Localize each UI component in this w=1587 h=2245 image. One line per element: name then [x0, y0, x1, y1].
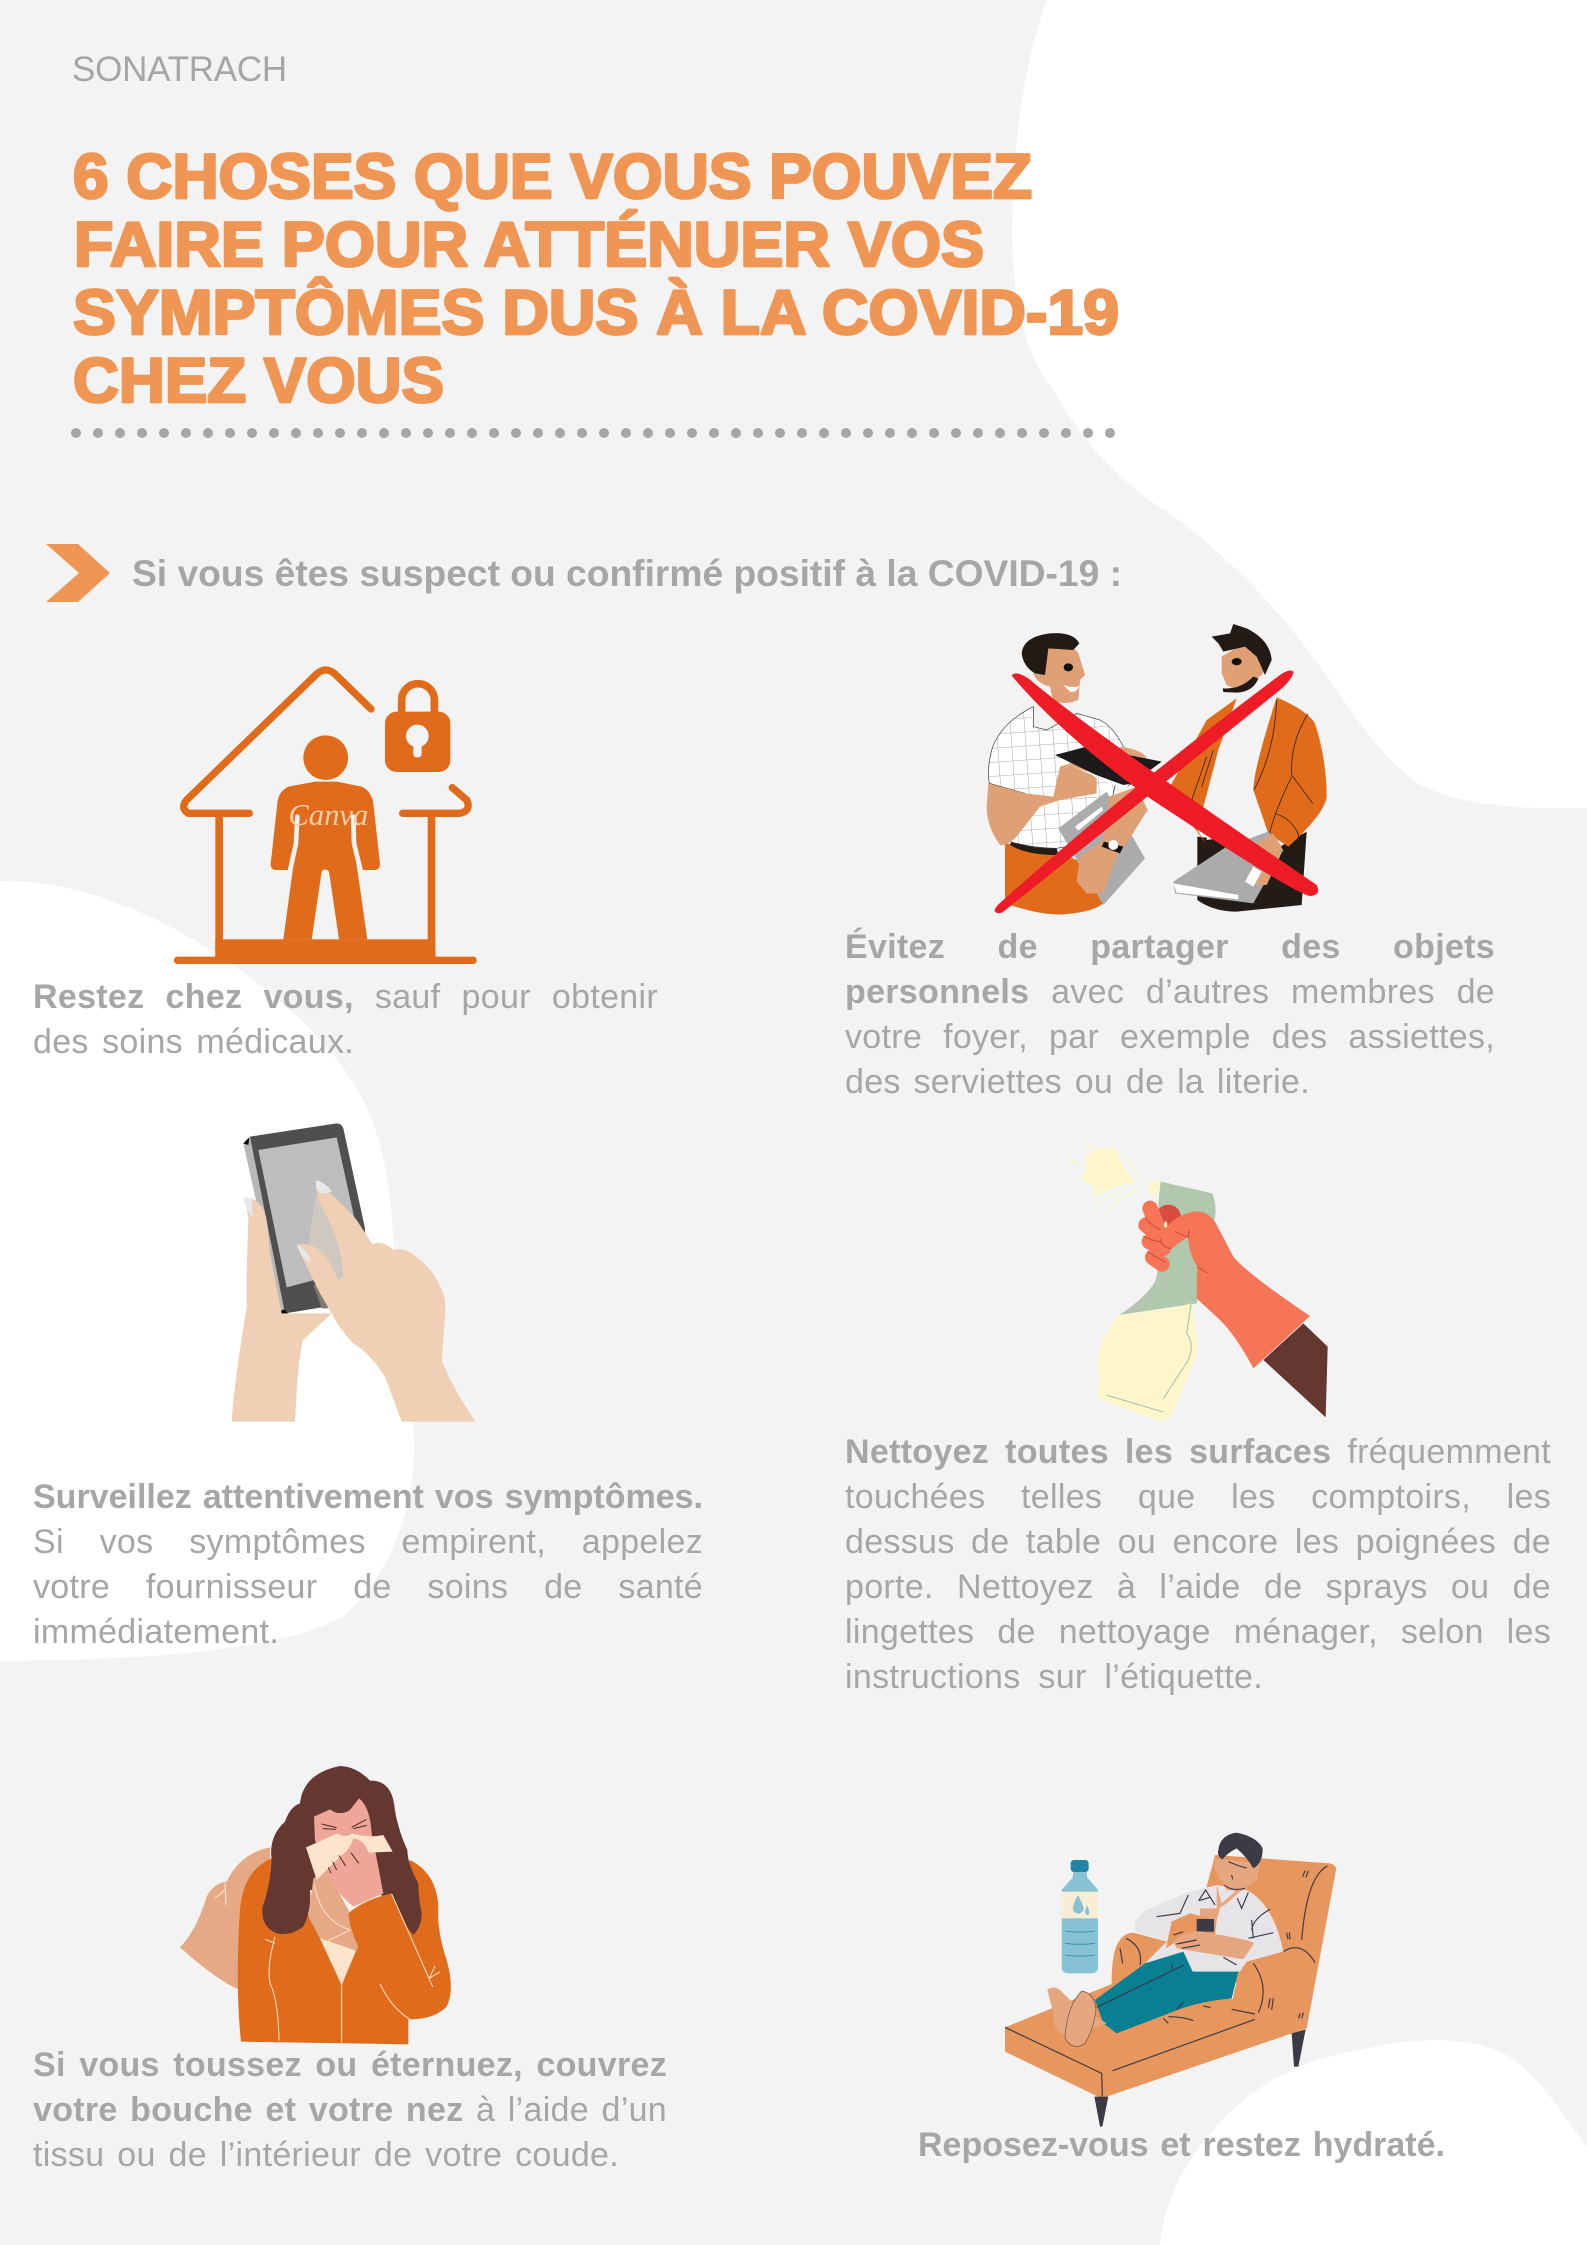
text: clean surfaces: touchées telles que les comptoirs, les: [845, 1478, 1551, 1516]
text: do not share items: personnels avec d’autres membres de: [845, 972, 1495, 1010]
illustration: gloved hand with spray bottle: [1069, 1143, 1328, 1421]
text: do not share items: Évitez de partager des objets: [845, 928, 1495, 966]
text: monitor symptoms: immédiatement.: [33, 1613, 279, 1651]
title: FAIRE POUR ATTÉNUER VOS: [74, 210, 984, 280]
dotted divider: [71, 428, 1115, 438]
illustration: man resting on chaise with water bottle: [1005, 1832, 1336, 2127]
text: monitor symptoms: Surveillez attentivement vos symptômes.: [33, 1478, 703, 1516]
panel: stay home: [33, 666, 658, 1060]
arrow chevron: [46, 544, 110, 602]
brand name: SONATRACH: [72, 50, 287, 89]
panel: cover cough or sneeze: [33, 1766, 667, 2174]
illustration: two men exchanging objects crossed out: [986, 624, 1327, 914]
text: cover cough or sneeze: Si vous toussez ou éternuez, couvrez: [33, 2046, 667, 2084]
text: stay home: [33, 978, 658, 1060]
text: clean surfaces: Nettoyez toutes les surfaces fréquemment: [845, 1433, 1551, 1471]
text: monitor symptoms: Si vos symptômes empirent, appelez: [33, 1523, 703, 1561]
text: do not share items: votre foyer, par exemple des assiettes,: [845, 1018, 1495, 1056]
title: SYMPTÔMES DUS À LA COVID-19: [73, 277, 1119, 348]
text: clean surfaces: dessus de table ou encore les poignées de: [845, 1523, 1551, 1561]
text: do not share items: [845, 928, 1495, 1100]
text: clean surfaces: instructions sur l’étiquette.: [845, 1658, 1263, 1696]
illustration: woman sneezing in tissue: [180, 1766, 451, 2044]
text: monitor symptoms: votre fournisseur de soins de santé: [33, 1568, 703, 1606]
subheading: Si vous êtes suspect ou confirmé positif à la COVID-19 :: [132, 553, 1122, 594]
text: clean surfaces: porte. Nettoyez à l’aide de sprays ou de: [845, 1568, 1551, 1606]
title: [73, 142, 1119, 416]
illustration: hands holding phone: [232, 1123, 476, 1422]
text: cover cough or sneeze: tissu ou de l’intérieur de votre coude.: [33, 2136, 619, 2174]
panel: do not share items: [845, 624, 1495, 1100]
text: stay home: des soins médicaux.: [33, 1022, 354, 1060]
text: stay home: Restez chez vous, sauf pour obtenir: [33, 978, 658, 1016]
text: clean surfaces: [845, 1433, 1551, 1696]
icon: person locked in house: [174, 666, 477, 964]
text: monitor symptoms: [33, 1478, 703, 1651]
text: cover cough or sneeze: votre bouche et votre nez à l’aide d’un: [33, 2090, 667, 2128]
panel: rest and hydrate: [918, 1832, 1445, 2164]
panel: clean surfaces: [845, 1143, 1551, 1696]
text: clean surfaces: lingettes de nettoyage ménager, selon les: [845, 1613, 1551, 1651]
panel: monitor symptoms: [33, 1123, 703, 1651]
title: 6 CHOSES QUE VOUS POUVEZ: [73, 142, 1032, 212]
text: do not share items: des serviettes ou de la literie.: [845, 1062, 1310, 1100]
text: cover cough or sneeze: [33, 2046, 667, 2174]
title: CHEZ VOUS: [73, 346, 444, 416]
text: rest and hydrate: Reposez-vous et restez hydraté.: [918, 2126, 1445, 2164]
icon: person locked in house: Canva: [288, 798, 368, 832]
